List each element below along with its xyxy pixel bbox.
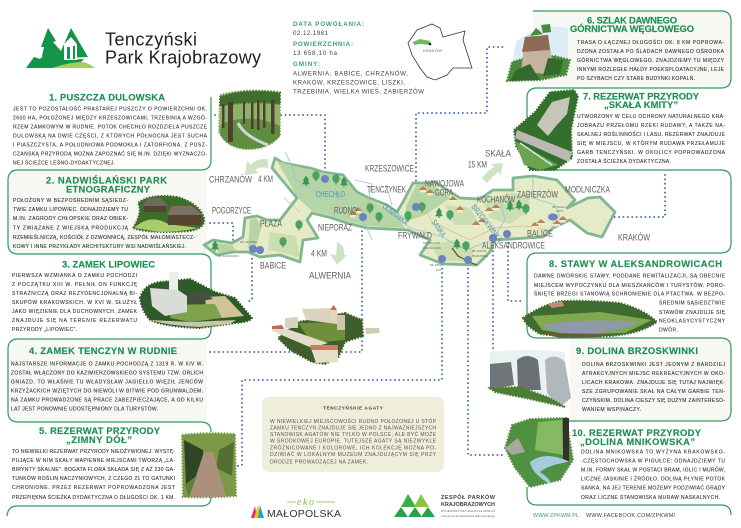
text: 7. Rezerwat przyrody Skała Kmity: SKALNEJ ROŚLINNOŚCI I LASU. REZERWAT ZNAJDUJE: [577, 130, 726, 138]
map: place labels: 15 KM: [468, 160, 487, 170]
map: place labels: BABICE: [260, 260, 286, 270]
text: 3. Zamek Lipowiec: PRZYRODY „LIPOWIEC”.: [12, 327, 77, 333]
illustration: forest: [219, 91, 280, 149]
text: 3. Zamek Lipowiec: JAKO WIĘZIENIE DLA DUCHOWNYCH. ZAMEK: [12, 309, 138, 315]
text: 1. Puszcza Dulowska: NEJ ŚCIEŻCE LEŚNO-DYDAKTYCZNEJ.: [13, 158, 115, 166]
logo: Zespół Parków Krajobrazowych: KRAJOBRAZOWYCH: [441, 502, 495, 508]
illustration: rezerwat Skała Kmity: [514, 90, 578, 170]
info block: POWIERZCHNIA:: [293, 41, 353, 48]
text: 5. Rezerwat Przyrody Zimny Dół: CHRONIONE. PRZEZ REZERWAT POPROWADZONA JEST: [12, 485, 175, 491]
logo: eko Małopolska: [251, 497, 341, 520]
text: 8. Stawy w Aleksandrowicach: NEOKLASYCYSTYCZNY: [659, 318, 726, 324]
map: place labels: SANKA: [429, 218, 448, 239]
text: 7. Rezerwat przyrody Skała Kmity: [577, 91, 726, 165]
text: 2. Nadwiślański Park Etnograficzny: RZEMIEŚLNICZĄ, KOŚCIÓŁ Z DZWONNICĄ, ZESPÓŁ MAŁOMIASTECZ-: [13, 233, 195, 241]
text: 8. Stawy w Aleksandrowicach: STAWÓW ZNAJDUJE SIĘ: [659, 309, 726, 316]
map: place labels: OLSZÓWKA: [381, 201, 410, 227]
text: 9. Dolina Brzoskwinki: LICACH KRAKOWA. ZNAJDUJE SIĘ TUTAJ NAJWIĘK-: [582, 380, 725, 386]
illustration: huts: [133, 196, 204, 232]
text: 6. Szlak dawnego górnictwa węglowego: GÓRNICTWA WĘGLOWEGO: [570, 23, 694, 34]
text: 3. Zamek Lipowiec: SKUPÓW KRAKOWSKICH. W XVI W. SŁUŻYŁ: [12, 299, 137, 306]
illustration: Zamek Lipowiec: [140, 272, 252, 328]
footer links: WWW.FACEBOOK.COM/ZPKWM/: [586, 513, 676, 519]
text: 4. Zamek Tenczyn w Rudnie: LAT JEST PONOWNIE UDOSTĘPNIONY DLA TURYSTÓW.: [11, 406, 158, 412]
map: place labels: KRAKÓW: [618, 232, 650, 242]
text: 3. Zamek Lipowiec: 3. ZAMEK LIPOWIEC: [62, 258, 155, 270]
callout: Tenczyńskie agaty: DZIWIAĆ W LOKALNYM MUZEUM ZNAJDUJĄCYM SIĘ PRZY: [270, 451, 437, 458]
text: 6. Szlak dawnego górnictwa węglowego: TRASA O ŁĄCZNEJ DŁUGOŚCI OK. 8 KM POPROWA-: [577, 38, 724, 46]
panel fills: [8, 11, 731, 422]
info block: ALWERNIA, BABICE, CHRZANÓW,: [293, 70, 408, 78]
text: 3. Zamek Lipowiec: [12, 258, 155, 333]
map: [204, 148, 650, 280]
map: markers: [249, 175, 558, 264]
text: 9. Dolina Brzoskwinki: SZE ZGRUPOWANIE SKAŁ NA CAŁYM GARBIE TEN-: [582, 389, 725, 395]
map: place labels: NATURA 2000: [423, 241, 440, 245]
map: place labels: TENCZYNEK: [367, 184, 406, 194]
map: place labels: 4 KM: [258, 174, 273, 184]
logo: Zespół Parków Krajobrazowych: ZESPÓŁ PARKÓW: [441, 493, 496, 501]
text: 5. Rezerwat Przyrody Zimny Dół: BIRYNTY SKALNE”. BOGATA FLORA SKŁADA SIĘ Z AŻ 230 GA-: [12, 466, 175, 473]
text: 6. Szlak dawnego górnictwa węglowego: GÓRNICTWA WĘGLOWEGO. ZNAJDZIEMY TU MIĘDZY: [577, 57, 725, 64]
text: 7. Rezerwat przyrody Skała Kmity: SIĘ W MIEJSCU, W KTÓRYM RUDAWA PRZEŁAMUJE: [577, 140, 726, 147]
text: 8. Stawy w Aleksandrowicach: ŚREDNIM SĄSIEDZTWIE: [659, 298, 726, 306]
text: 7. Rezerwat przyrody Skała Kmity: GARB TENCZYŃSKI. W OKOLICY POPROWADZONA: [577, 149, 726, 156]
text: 7. Rezerwat przyrody Skała Kmity: JOBRAZU PRZEŁOMU RZEKI RUDAWY, A TAKŻE NA-: [577, 122, 725, 129]
logo: eko Małopolska: eko: [297, 497, 314, 508]
text: 4. Zamek Tenczyn w Rudnie: KRZYŻACKICH WZIĘTYCH DO NIEWOLI W BITWIE POD GRUNWALDEM.: [11, 388, 203, 394]
text: 10. Rezerwat przyrody Dolina Mnikowska: 10. REZERWAT PRZYRODY: [572, 427, 702, 438]
text: 5. Rezerwat Przyrody Zimny Dół: TO NIEWIELKI REZERWAT PRZYRODY NIEOŻYWIONEJ. WYSTĘ-: [12, 448, 175, 455]
text: 7. Rezerwat przyrody Skała Kmity: 7. REZERWAT PRZYRODY: [583, 91, 700, 102]
text: 1. Puszcza Dulowska: [13, 92, 208, 166]
map: place labels: DOLINA SANKI: [423, 246, 441, 250]
map: place labels: RP. KAJASÓWKA: [218, 253, 239, 258]
map: place labels: BRZOSKWINKA: [469, 203, 505, 244]
map: place labels: MNIKOWSKA: [472, 254, 488, 258]
title: [105, 30, 261, 68]
text: 10. Rezerwat przyrody Dolina Mnikowska: -CZĘSTOCHOWSKA W PIGUŁCE: ODNAJDZIEMY TU: [581, 458, 725, 464]
text: 9. Dolina Brzoskwinki: 9. DOLINA BRZOSKWINKI: [576, 345, 698, 356]
text: 7. Rezerwat przyrody Skała Kmity: UTWORZONY W CELU OCHRONY NATURALNEGO KRA-: [577, 114, 725, 120]
text: 2. Nadwiślański Park Etnograficzny: M.IN. ZAGRODY CHŁOPSKIE ORAZ OBIEK-: [13, 216, 128, 222]
text: 3. Zamek Lipowiec: PIERWSZA WZMIANKA O ZAMKU POCHODZI: [12, 273, 137, 279]
text: 10. Rezerwat przyrody Dolina Mnikowska: „DOLINA MNIKOWSKA”: [580, 436, 695, 447]
footer links: [533, 513, 676, 519]
map: place labels: GÓRA: [435, 188, 453, 198]
text: 9. Dolina Brzoskwinki: ATRAKCYJNYCH MIEJSC REKREACYJNYCH W OKO-: [582, 371, 725, 377]
map: place labels: POGORZYCE: [212, 206, 251, 216]
illustration: Dolina Mnikowska: [505, 418, 573, 487]
callout: Tenczyńskie agaty: W NIEWIELKIEJ MIEJSCOWOŚCI RUDNO POŁOŻONEJ U STÓP: [270, 417, 437, 425]
text: 1. Puszcza Dulowska: DULOWSKĄ NA DWIE CZĘŚCI, Z KTÓRYCH PÓŁNOCNA JEST SUCHA: [13, 132, 208, 140]
text: 4. Zamek Tenczyn w Rudnie: NAJSTARSZE INFORMACJE O ZAMKU POCHODZĄ Z 1319 R. W XIV W.: [11, 362, 203, 368]
text: 9. Dolina Brzoskwinki: [576, 345, 726, 413]
map: place labels: RP. SKAŁA: [552, 205, 565, 209]
text: 2. Nadwiślański Park Etnograficzny: TWIE ZAMKU LIPOWIEC. ODNAJDZIEMY TU: [13, 207, 128, 213]
map: place labels: NIEPORAZ: [318, 222, 352, 232]
text: 10. Rezerwat przyrody Dolina Mnikowska: SANKA. NA JEJ TERENIE MOŻEMY PODZIWIAĆ GRĄDY: [581, 484, 726, 492]
logo: Zespół Parków Krajobrazowych: [394, 493, 496, 518]
map: place labels: KMITY: [556, 209, 564, 213]
map: place labels: CHRZANÓW: [209, 174, 252, 184]
text: 10. Rezerwat przyrody Dolina Mnikowska: DOLINA MNIKOWSKA TO WYŻYNA KRAKOWSKO-: [581, 448, 725, 456]
text: 3. Zamek Lipowiec: ZNAJDUJE SIĘ NA TERENIE REZERWATU: [12, 318, 137, 324]
callout: Tenczyńskie agaty: [262, 397, 444, 472]
illustration: szlak górnictwa: [507, 24, 570, 81]
callout: Tenczyńskie agaty: W ŚRODKOWEJ EUROPIE. TUTEJSZE AGATY SĄ NIEZWYKLE: [270, 436, 437, 444]
map: forest areas: [216, 161, 450, 253]
text: 8. Stawy w Aleksandrowicach: MIEJSCEM WYPOCZYNKU DLA MIESZKAŃCÓW I TURYSTÓW. PORO-: [534, 282, 725, 289]
callout: Tenczyńskie agaty: ZRÓŻNICOWANE I KOLOROWE. ICH KOLEKCJĘ MOŻNA PO-: [270, 444, 436, 452]
text: 6. Szlak dawnego górnictwa węglowego: INNYMI ROZLEGŁE HAŁDY POEKSPLOATACYJNE, LEJE: [577, 67, 725, 73]
text: 1. Puszcza Dulowska: RZEM ZAMKOWYM W RUDNIE. POTOK CHECHŁO ROZDZIELA PUSZCZĘ: [13, 124, 208, 130]
illustration: stawy: [523, 301, 657, 338]
text: 1. Puszcza Dulowska: CZAŃSKĄ PRZYRODĄ MOŻNA ZAPOZNAĆ SIĘ M.IN. DZIĘKI WYZNACZO-: [13, 150, 207, 158]
text: 1. Puszcza Dulowska: JEST TO POZOSTAŁOŚĆ PRASTAREJ PUSZCZY O POWIERZCHNI OK.: [13, 104, 207, 112]
text: 6. Szlak dawnego górnictwa węglowego: 6. SZLAK DAWNEGO: [587, 14, 677, 26]
text: 2. Nadwiślański Park Etnograficzny: [13, 174, 195, 250]
text: 4. Zamek Tenczyn w Rudnie: GNIAZD. TO WŁAŚNIE TU WŁADYSŁAW JAGIEŁŁO WIĘZIŁ JEŃCÓW: [11, 378, 203, 386]
text: 8. Stawy w Aleksandrowicach: DWÓR.: [659, 326, 678, 334]
info block: 02.12.1981: [293, 30, 329, 37]
locator map: KRAKÓW: [423, 48, 442, 53]
text: 9. Dolina Brzoskwinki: WANIEM WSPINACZY.: [582, 407, 641, 413]
text: 4. Zamek Tenczyn w Rudnie: [11, 345, 203, 412]
illustration: rezerwat Zimny Dół: [182, 433, 236, 497]
info block: [293, 21, 424, 96]
callout: Tenczyńskie agaty: ZAMKU TENCZYN ZNAJDUJE SIĘ JEDNO Z NAJWAŻNIEJSZYCH: [270, 424, 436, 432]
text: 7. Rezerwat przyrody Skała Kmity: ZOSTAŁA ŚCIEŻKA DYDAKTYCZNA.: [577, 157, 671, 165]
text: 1. Puszcza Dulowska: 1. PUSZCZA DULOWSKA: [49, 92, 165, 102]
text: 4. Zamek Tenczyn w Rudnie: ZOSTAŁ WŁĄCZONY DO KAZIMIERZOWSKIEGO SYSTEMU TZW. ORLICH: [11, 370, 203, 376]
map: place labels: MODLNICZKA: [565, 184, 610, 194]
text: 10. Rezerwat przyrody Dolina Mnikowska: [572, 427, 726, 501]
illustration: Dolina Brzoskwinki: [490, 350, 571, 407]
map: place labels: CHECHŁO: [316, 190, 345, 199]
text: 6. Szlak dawnego górnictwa węglowego: PO SZYBACH CZY STARE BUDYNKI KOPALŃ.: [577, 75, 695, 82]
frame: right serpentine: [527, 11, 731, 515]
callout: Tenczyńskie agaty: STANOWISK AGATÓW NIE TYLKO W POLSCE, ALE BYĆ MOŻE: [270, 431, 437, 438]
title: Tenczyński: [105, 30, 197, 50]
locator map: [408, 24, 472, 80]
text: 2. Nadwiślański Park Etnograficzny: KOWY I INNE PRZYKŁADY ARCHITEKTURY WSI NADWIŚLAŃSKIEJ.: [13, 242, 186, 250]
dotted connectors: [210, 47, 665, 466]
map: place labels: KOCHANÓW: [477, 194, 515, 204]
map: place labels: DÓŁ: [436, 267, 442, 272]
map: place labels: BALICE: [527, 228, 553, 238]
info block: GMINY:: [293, 61, 320, 68]
text: 5. Rezerwat Przyrody Zimny Dół: TUNKÓW ROŚLIN NACZYNIOWYCH, Z CZEGO 21 TO GATUNKI: [12, 474, 175, 482]
map: place labels: [209, 148, 650, 280]
map: place labels: ZABIERZÓW: [517, 190, 558, 200]
callout: Tenczyńskie agaty: TENCZYŃSKIE AGATY: [323, 404, 384, 412]
map: place labels: FRYWAŁD: [398, 230, 432, 240]
text: 7. Rezerwat przyrody Skała Kmity: „SKAŁA KMITY”: [604, 99, 678, 110]
text: 6. Szlak dawnego górnictwa węglowego: DZONA ZOSTAŁA PO ŚLADACH DAWNEGO OŚRODKA: [577, 47, 725, 55]
text: 5. Rezerwat Przyrody Zimny Dół: [12, 425, 175, 501]
text: 2. Nadwiślański Park Etnograficzny: 2. NADWIŚLAŃSKI PARK: [46, 174, 167, 186]
info block: 13 658,10 ha: [293, 50, 338, 57]
map: place labels: RP. LIPOWIEC: [240, 240, 258, 244]
logo: eko Małopolska: MAŁOPOLSKA: [267, 508, 341, 520]
map: place labels: SKAŁA: [485, 148, 511, 158]
illustration: Zamek Tenczyn: [272, 305, 380, 364]
text: 4. Zamek Tenczyn w Rudnie: NA ZAMKU PROWADZONE SĄ PRACE ZABEZPIECZAJĄCE, A OD KILKU: [11, 398, 203, 404]
title: Park Krajobrazowy: [105, 48, 261, 68]
text: 9. Dolina Brzoskwinki: DOLINA BRZOSKWINKI JEST JEDNYM Z BARDZIEJ: [582, 362, 726, 368]
map: place labels: RUDNO: [334, 206, 357, 216]
text: 5. Rezerwat Przyrody Zimny Dół: 5. REZERWAT PRZYRODY: [39, 425, 161, 436]
text: 9. Dolina Brzoskwinki: CZYŃSKIM. DOLINA CIESZY SIĘ DUŻYM ZAINTERESO-: [582, 397, 725, 404]
logo: Zespół Parków Krajobrazowych: WOJEWÓDZTWA MAŁOPOLSKIEGO: [441, 508, 495, 513]
text: 8. Stawy w Aleksandrowicach: DAWNE DWORSKIE STAWY, PODDANE REWITALIZACJI, SĄ OBECNIE: [534, 274, 726, 280]
text: 8. Stawy w Aleksandrowicach: ŚNIĘTE BRZEGI STANOWIĄ SCHRONIENIE DLA PTACTWA. W BEZPO-: [534, 290, 725, 298]
map: rivers and roads: [285, 152, 562, 250]
text: 10. Rezerwat przyrody Dolina Mnikowska: M.IN. FORMY SKAŁ W POSTACI BRAM, IGLIC I MURÓW,: [581, 466, 725, 474]
text: 1. Puszcza Dulowska: I PIASZCZYSTA, A POŁUDNIOWA PODMOKŁA I ZATORFIONA. Z PUSZ-: [13, 142, 207, 148]
text: 8. Stawy w Aleksandrowicach: 8. STAWY W ALEKSANDROWICACH: [549, 258, 722, 269]
logo: [26, 28, 95, 68]
map: place labels: ALEKSANDROWICE: [482, 240, 545, 250]
text: 2. Nadwiślański Park Etnograficzny: TY ZWIĄZANE Z WIEJSKĄ PRODUKCJĄ: [13, 226, 129, 232]
arrow: Chrzanów: [245, 159, 268, 175]
map: place labels: ALWERNIA: [309, 270, 351, 280]
text: 3. Zamek Lipowiec: STRAŻNICZĄ ORAZ REZYDENCJONALNĄ BI-: [12, 290, 137, 297]
text: 10. Rezerwat przyrody Dolina Mnikowska: LICZNE JASKINIE I ŹRÓDŁO. DOLINĄ PŁYNIE POTOK: [581, 476, 726, 482]
map: place labels: KRZESZOWICE: [365, 164, 414, 174]
frame: left serpentine: [7, 97, 211, 516]
map: trees and huts: [211, 171, 567, 252]
map: place labels: RP. DOLINA: [472, 249, 487, 253]
callout: Tenczyńskie agaty: DRODZE PROWADZĄCEJ NA ZAMEK.: [270, 460, 368, 466]
text: 5. Rezerwat Przyrody Zimny Dół: PRZEPIĘKNA ŚCIEŻKA DYDAKTYCZNA O DŁUGOŚCI OK. 1 KM.: [12, 493, 175, 501]
map: park area: [204, 158, 615, 265]
map: place labels: 4 KM: [311, 248, 327, 258]
arrow: Skała: [482, 163, 503, 183]
text: 3. Zamek Lipowiec: Z POCZĄTKU XIII W. PEŁNIŁ ON FUNKCJĘ: [12, 282, 138, 288]
info block: DATA POWOŁANIA:: [293, 21, 364, 28]
map: place labels: RP. ZIMNY: [430, 263, 443, 267]
text: 2. Nadwiślański Park Etnograficzny: ETNOGRAFICZNY: [66, 184, 151, 194]
text: 8. Stawy w Aleksandrowicach: [534, 258, 726, 334]
map: place labels: PŁAZA: [260, 218, 282, 228]
info block: KRAKÓW, KRZESZOWICE, LISZKI,: [293, 80, 405, 86]
text: 2. Nadwiślański Park Etnograficzny: POŁOŻONY W BEZPOŚREDNIM SĄSIEDZ-: [13, 196, 128, 204]
text: 5. Rezerwat Przyrody Zimny Dół: „ZIMNY DÓŁ”: [66, 434, 132, 445]
text: 6. Szlak dawnego górnictwa węglowego: [570, 14, 725, 82]
text: 10. Rezerwat przyrody Dolina Mnikowska: ORAZ LICZNE STANOWISKA MURAW NASKALNYCH.: [581, 495, 720, 501]
text: 4. Zamek Tenczyn w Rudnie: 4. ZAMEK TENCZYN W RUDNIE: [29, 345, 177, 356]
info block: TRZEBINIA, WIELKA WIEŚ, ZABIERZÓW: [293, 88, 424, 96]
arrow: Alwernia: [330, 242, 347, 265]
map: place labels: NAWOJOWA: [425, 178, 464, 188]
footer links: WWW.ZPKWM.PL: [533, 513, 579, 519]
text: 1. Puszcza Dulowska: 2600 HA, POŁOŻONEJ MIĘDZY KRZESZOWICAMI, TRZEBINIĄ A WZGÓ-: [13, 114, 207, 122]
logo: Zespół Parków Krajobrazowych: Instytucja Województwa Małopolskiego: [441, 514, 496, 518]
text: 5. Rezerwat Przyrody Zimny Dół: PUJĄCE W NIM SKAŁY WAPIENNE MIEJSCAMI TWORZĄ „LA-: [12, 458, 175, 464]
